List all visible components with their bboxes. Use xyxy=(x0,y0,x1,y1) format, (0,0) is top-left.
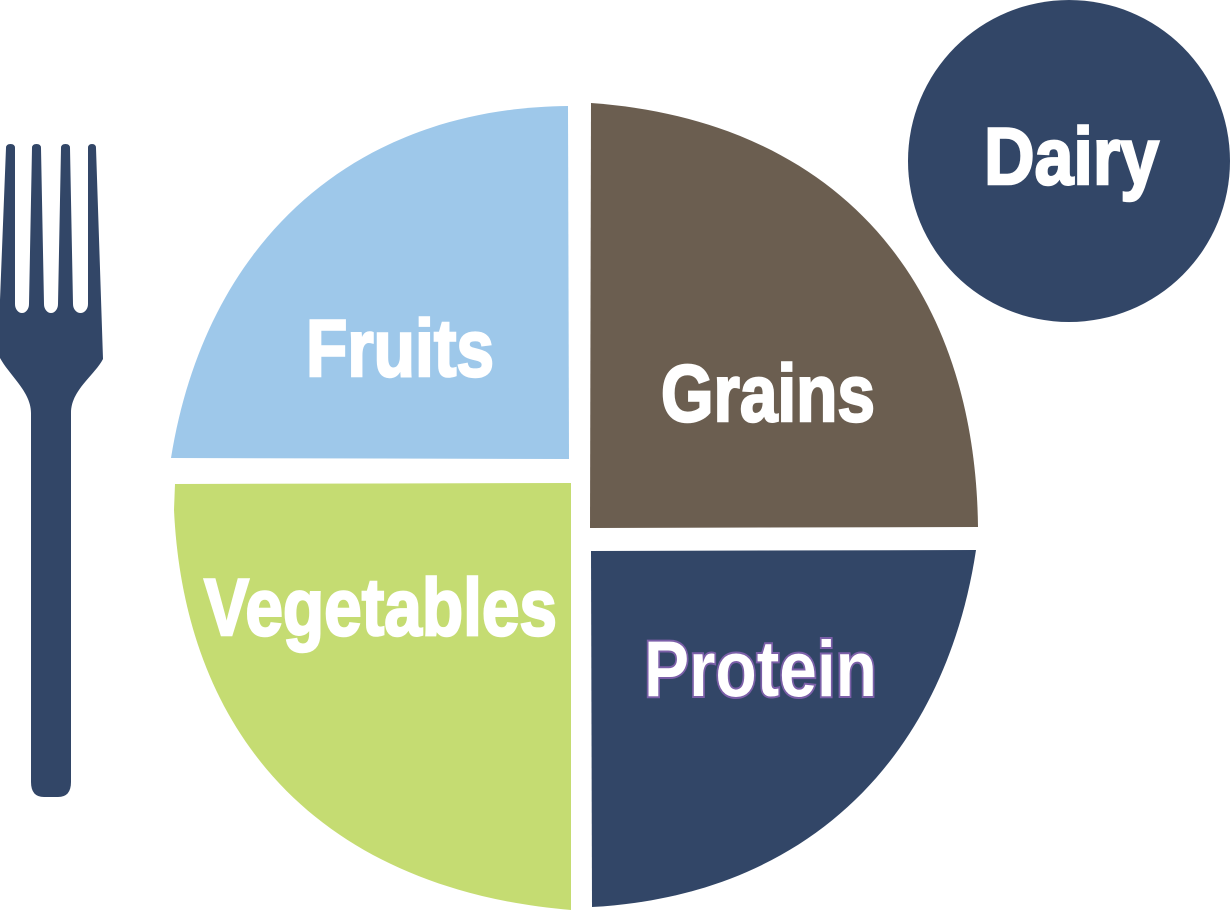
panel: dairy circle xyxy=(908,0,1230,322)
label: protein: Protein xyxy=(644,624,877,713)
label: vegetables: Vegetables xyxy=(204,563,557,653)
panel: fruits quadrant xyxy=(171,106,569,459)
icon: fork xyxy=(0,144,103,797)
label: grains: Grains xyxy=(661,349,875,439)
label: dairy: Dairy xyxy=(984,112,1159,202)
label: fruits: Fruits xyxy=(306,304,494,394)
panel: vegetables quadrant xyxy=(174,483,571,910)
panel: grains quadrant xyxy=(590,103,978,528)
panel: protein quadrant xyxy=(591,550,976,907)
